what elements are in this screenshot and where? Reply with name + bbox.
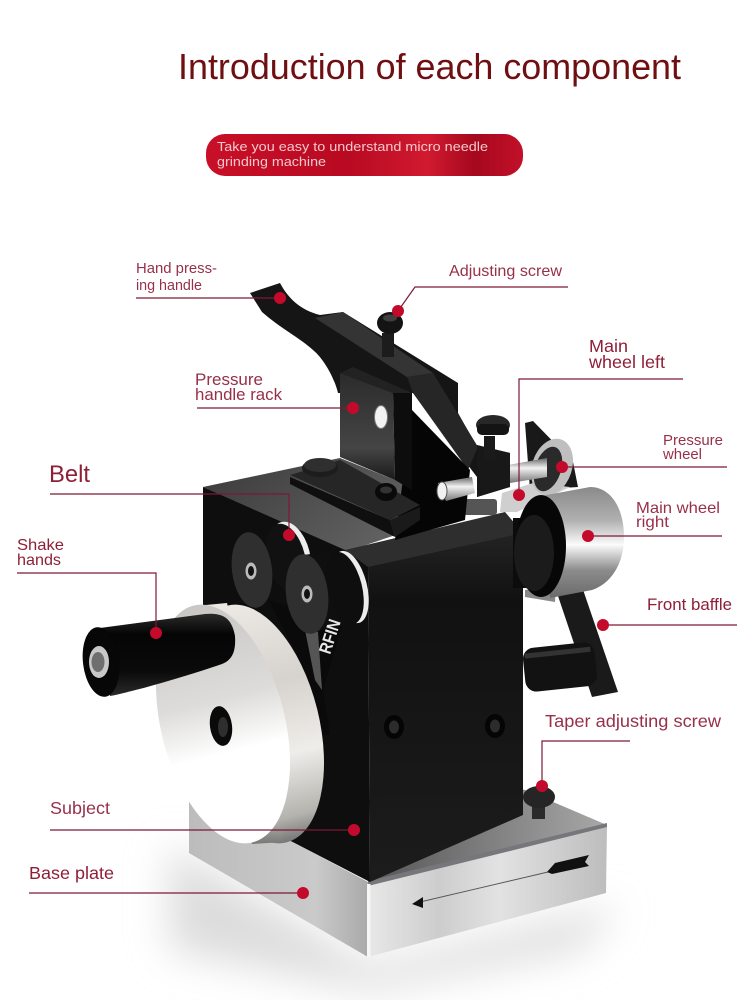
callout: main wheel left [513, 336, 683, 501]
callout: shake hands [17, 537, 162, 639]
upper pulley [228, 517, 318, 610]
pressure plate and bearing [463, 421, 580, 515]
callout: base plate [29, 863, 309, 899]
belt and pulleys [228, 517, 375, 735]
pressure handle [250, 283, 510, 497]
callout: taper adjusting screw: Taper adjusting screw [545, 711, 721, 731]
callout: main wheel left: wheel left [588, 352, 665, 372]
adjusting screw [377, 312, 403, 357]
body block [203, 458, 523, 882]
callout: pressure wheel: wheel [662, 447, 702, 463]
callout: base plate: Base plate [29, 863, 114, 883]
title: Introduction of each component [178, 46, 681, 87]
belt and pulleys: RFIN [316, 617, 345, 656]
callout: hand pressing handle: Hand press- [136, 261, 217, 277]
base arrow [412, 855, 589, 908]
callout: main wheel right: Main wheel [636, 500, 720, 517]
callout: pressure handle rack: Pressure [195, 371, 263, 389]
callout: shake hands: Shake [17, 537, 64, 554]
callout: belt: Belt [49, 461, 90, 488]
callout: adjusting screw: Adjusting screw [449, 263, 562, 280]
subtitle pill: Take you easy to understand micro needle [217, 139, 488, 154]
callout: pressure wheel [556, 433, 727, 473]
needle shaft and thumb screw [437, 415, 547, 501]
floor shadow [170, 845, 620, 990]
subtitle pill [206, 134, 523, 176]
handle rack [340, 367, 470, 540]
lower pulley [281, 547, 375, 636]
callout: main wheel left: Main [589, 336, 628, 356]
callout: shake hands: hands [17, 552, 61, 569]
callout: belt [49, 461, 295, 541]
callout: subject: Subject [50, 798, 110, 818]
base plate [189, 785, 607, 957]
machine illustration [79, 283, 624, 957]
callout: pressure handle rack: handle rack [195, 386, 283, 404]
taper adjusting screw [523, 786, 555, 819]
subtitle pill: grinding machine [217, 154, 326, 169]
callout: hand pressing handle: ing handle [136, 278, 202, 294]
rack mounting bar [290, 458, 420, 537]
callout: front baffle: Front baffle [647, 595, 732, 614]
callout: taper adjusting screw [536, 711, 721, 792]
callout: hand pressing handle [136, 261, 286, 304]
front baffle and rod [522, 575, 618, 697]
callout: pressure handle rack [195, 371, 359, 414]
callout: pressure wheel: Pressure [663, 433, 723, 449]
main wheel right cylinder [513, 487, 624, 598]
callout: front baffle [597, 595, 737, 631]
callout: adjusting screw [392, 263, 568, 317]
callout: subject [50, 798, 360, 836]
crank handle [79, 614, 235, 699]
callout: main wheel right [582, 500, 722, 542]
hand wheel [133, 591, 347, 857]
callout: main wheel right: right [636, 514, 670, 531]
